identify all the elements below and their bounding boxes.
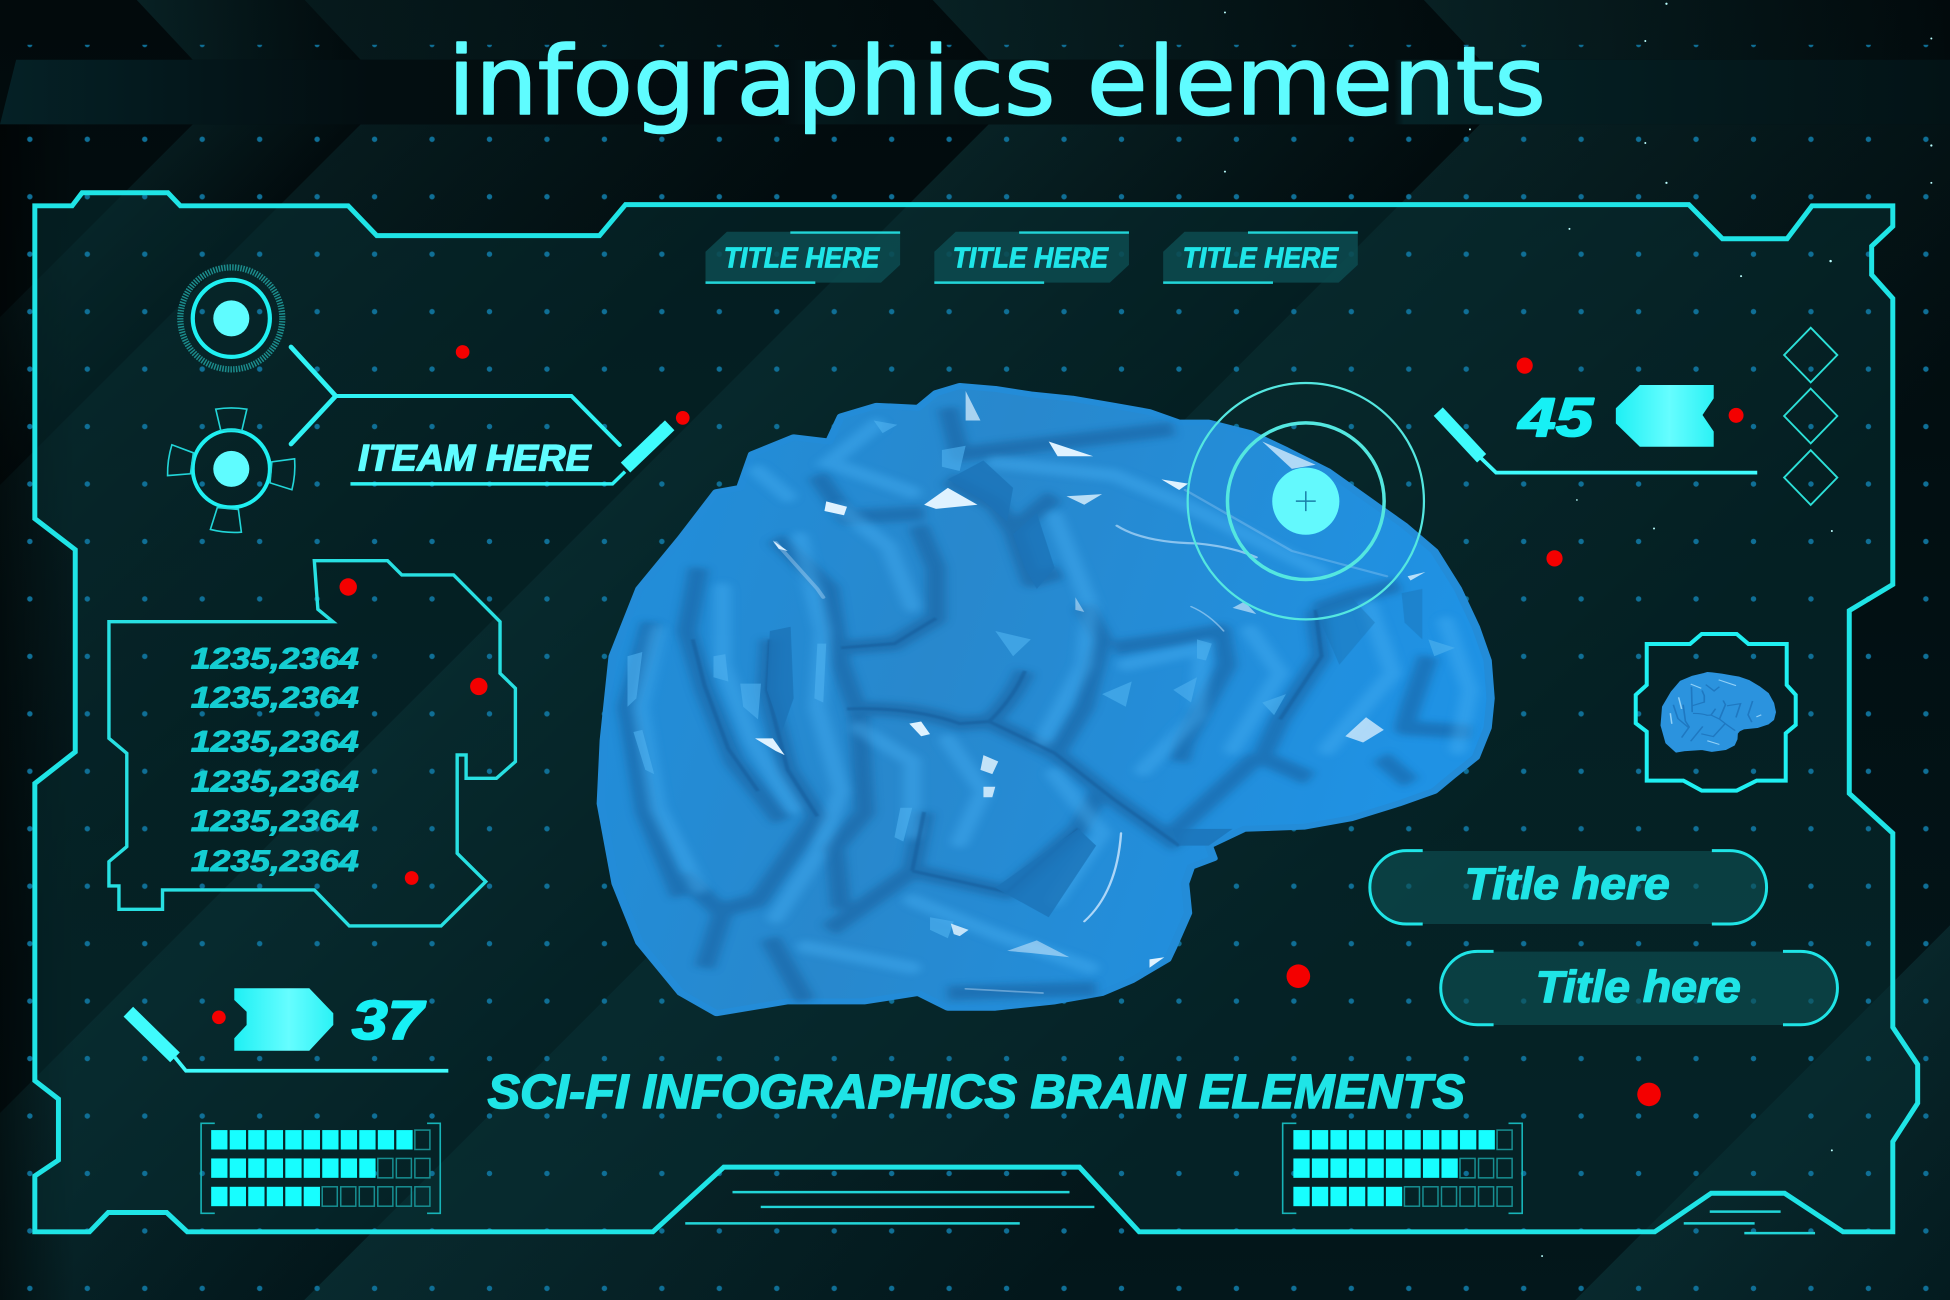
star specks	[1224, 3, 1932, 1257]
chip: 45	[1616, 385, 1714, 447]
main HUD frame outline	[35, 193, 1918, 1232]
pill: title here 2: Title here	[1536, 962, 1741, 1012]
brain illustration	[601, 386, 1491, 1013]
icon: 37 connector	[128, 1012, 448, 1071]
icon: gear target	[166, 408, 296, 533]
tab 1: TITLE HERE	[724, 242, 880, 274]
icon: radar target	[180, 267, 282, 369]
bottom right frame lines	[1684, 1212, 1815, 1233]
heading: sci-fi brain elements: SCI-FI INFOGRAPHICS BRAIN ELEMENTS	[488, 1065, 1465, 1119]
number: 45: 45	[1517, 386, 1595, 448]
tab 2	[934, 232, 1129, 283]
number rows: 1235,2364	[191, 682, 359, 715]
number: 37: 37	[352, 989, 426, 1051]
icon: 45 connector	[1438, 412, 1757, 473]
number rows	[191, 642, 359, 878]
tabs row	[706, 232, 1358, 283]
mini brain frame	[1636, 634, 1796, 791]
progress bars right	[1283, 1123, 1522, 1213]
target rings on brain	[1188, 383, 1424, 619]
tab 1	[706, 232, 900, 283]
pill: title here 2	[1441, 951, 1837, 1025]
number rows: 1235,2364	[191, 726, 359, 759]
number rows: 1235,2364	[191, 845, 359, 878]
title: infographics elements	[448, 27, 1546, 137]
label: item here: ITEAM HERE	[358, 437, 592, 479]
number rows: 1235,2364	[191, 642, 359, 675]
bottom centre frame lines	[685, 1192, 1094, 1223]
number rows: 1235,2364	[191, 766, 359, 799]
number rows: 1235,2364	[191, 805, 359, 838]
panel: main HUD frame fill	[35, 193, 1918, 1232]
panel: number list	[109, 561, 515, 926]
mini brain	[1662, 673, 1775, 752]
panel outline	[109, 561, 515, 926]
item connector	[291, 347, 670, 484]
tab 3	[1163, 232, 1358, 283]
pill: title here 1: Title here	[1465, 859, 1670, 909]
diamonds	[1784, 328, 1837, 505]
pill: title here 1	[1370, 851, 1767, 924]
chip: 37	[234, 988, 333, 1051]
tab 2: TITLE HERE	[953, 242, 1109, 274]
tab 3: TITLE HERE	[1183, 242, 1339, 274]
red marker dots	[212, 345, 1744, 1106]
progress bars left	[201, 1123, 440, 1213]
